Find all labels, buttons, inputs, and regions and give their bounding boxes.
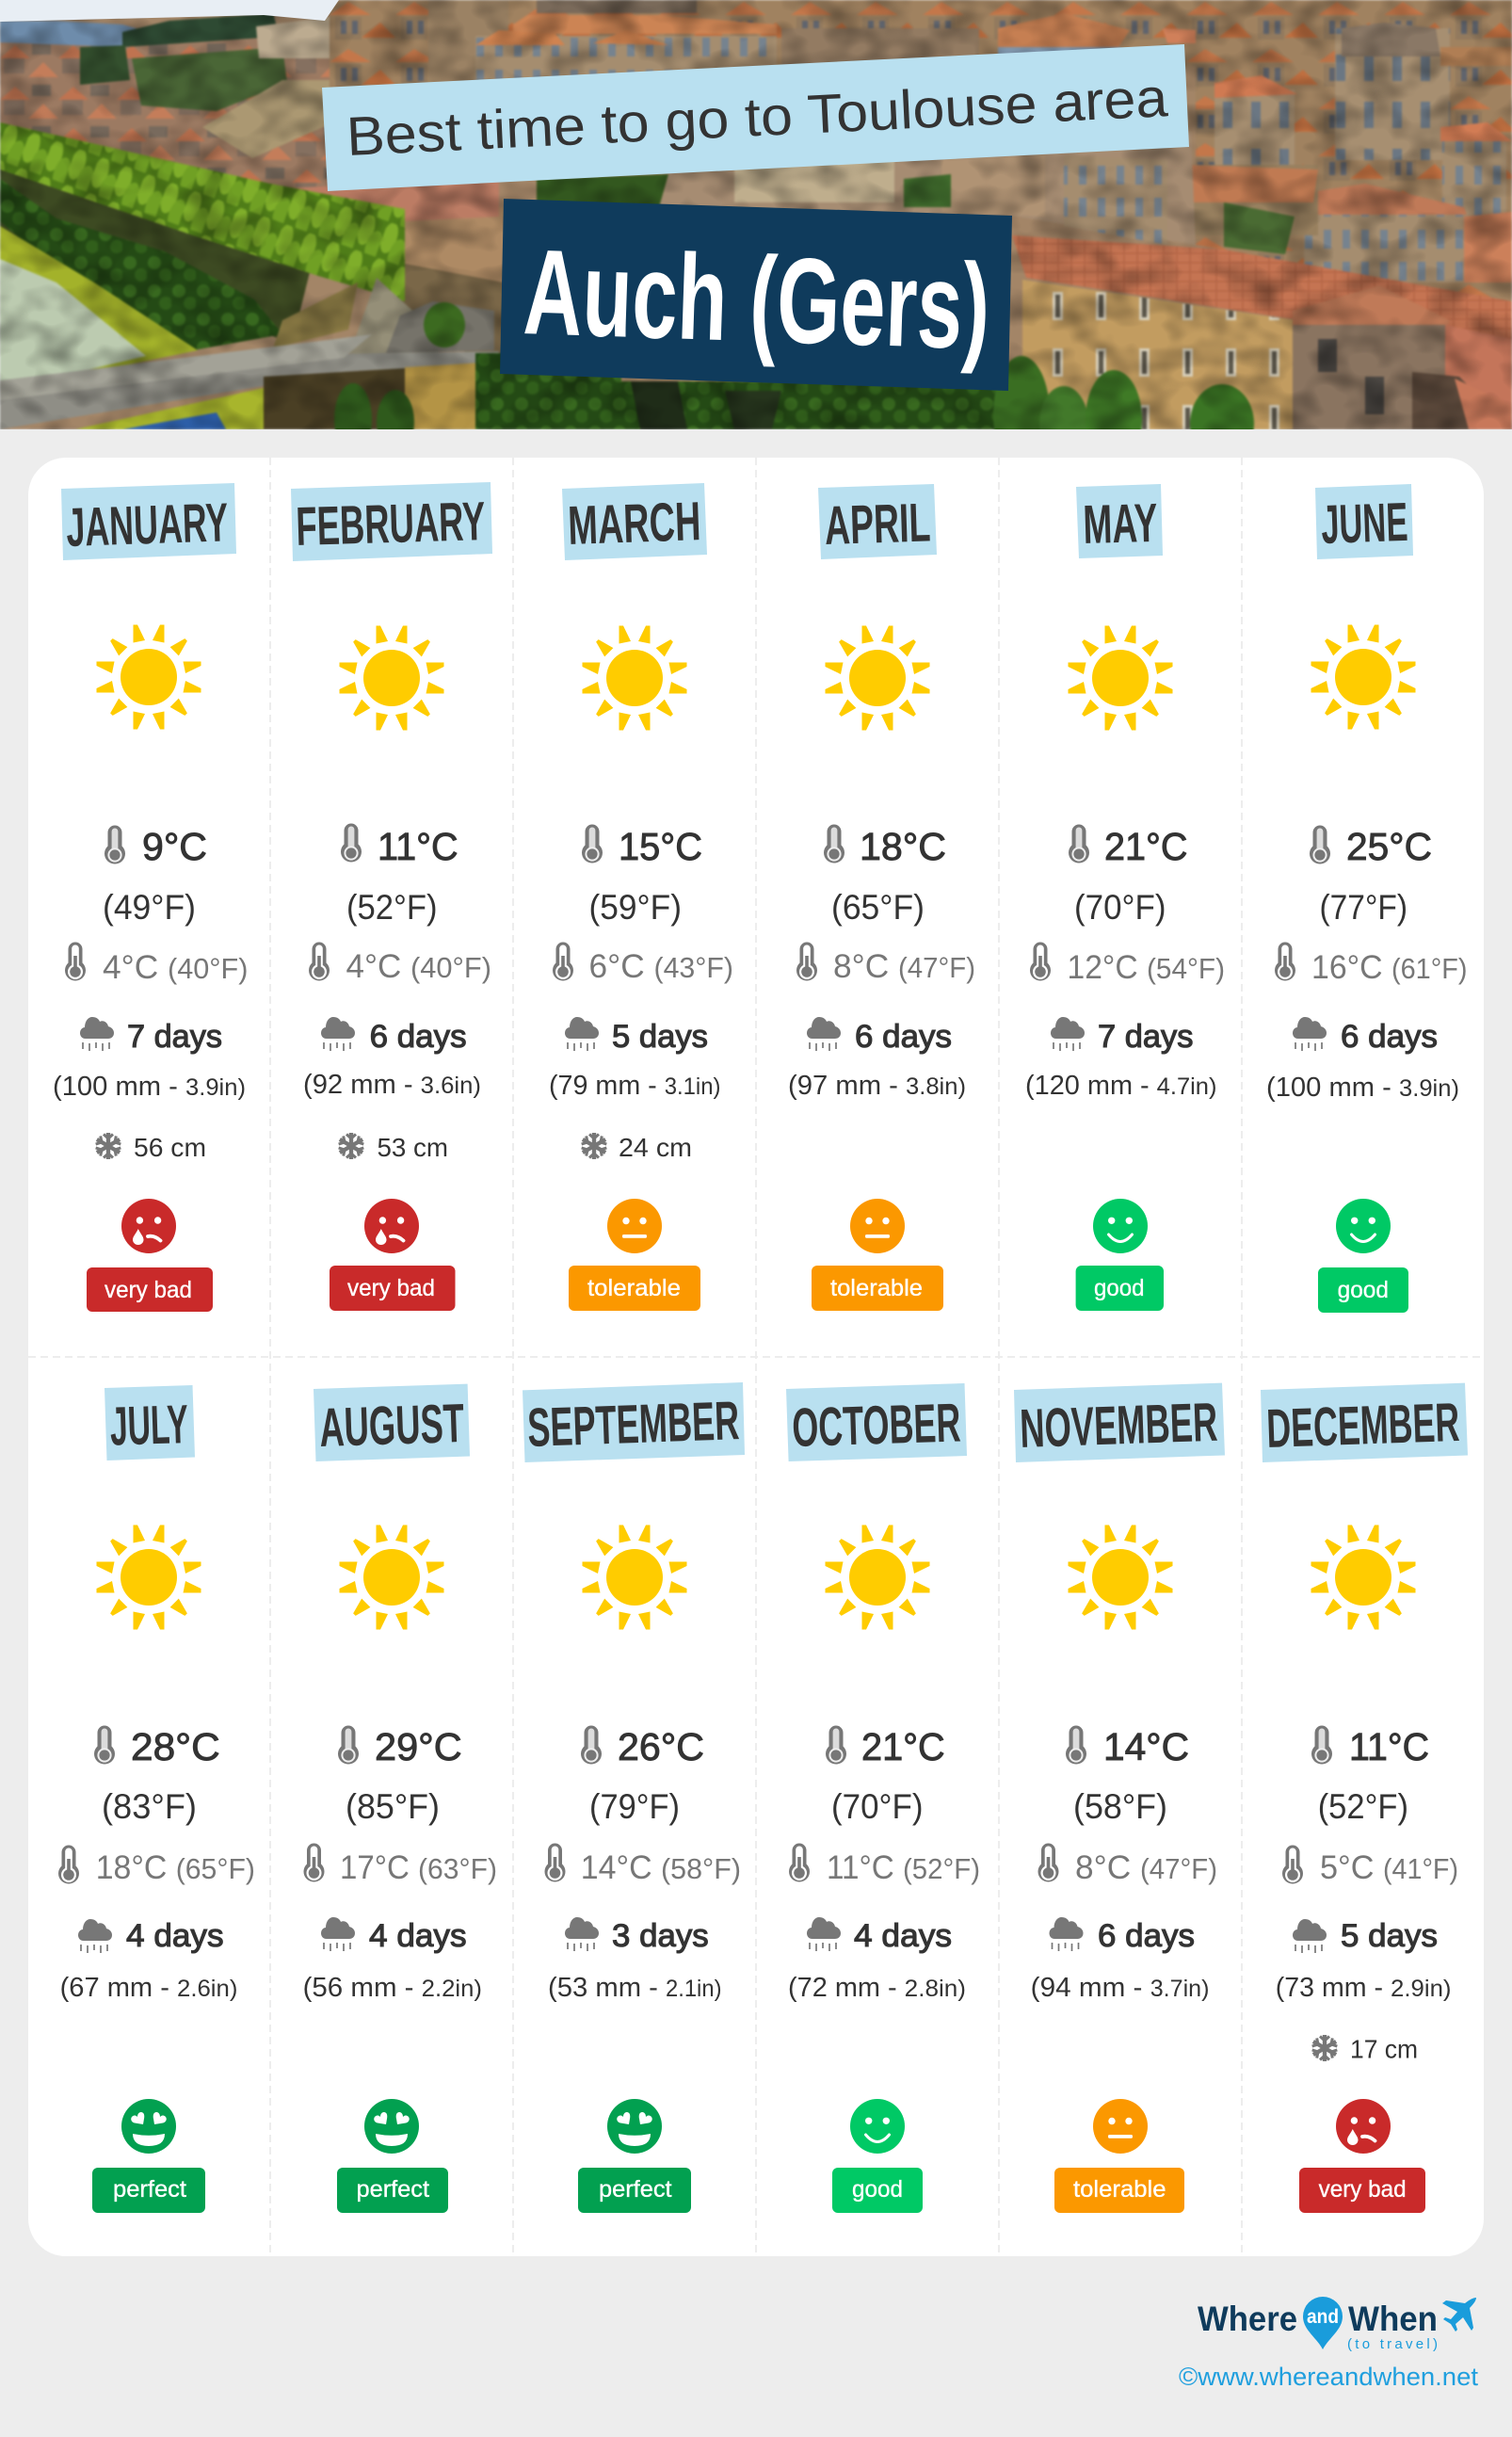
mean temperature <box>103 825 207 927</box>
panel: October <box>786 1383 980 2213</box>
minimum temperature <box>309 942 491 985</box>
mean temperature: (79°F) <box>589 1787 680 1826</box>
rating: perfect <box>92 2099 205 2213</box>
minimum temperature: 11°C <box>827 1849 903 1886</box>
rainfall: (53 mm - <box>548 1973 666 2003</box>
heading: MAY: MAY <box>1083 492 1158 556</box>
heading: FEBRUARY <box>291 482 492 561</box>
minimum temperature: (58°F) <box>661 1852 741 1885</box>
rating: good <box>1076 1199 1164 1311</box>
icon: sun <box>96 1525 201 1629</box>
panel: March <box>549 483 733 1311</box>
rainfall <box>303 1017 481 1100</box>
heading: AUGUST <box>314 1384 470 1461</box>
mean temperature <box>341 823 458 927</box>
heading: JANUARY: JANUARY <box>65 492 229 558</box>
rating: tolerable: tolerable <box>830 1275 923 1301</box>
rainfall: 2.2in) <box>422 1976 482 2002</box>
mean temperature <box>338 1725 462 1826</box>
panel: February <box>291 482 492 1311</box>
rating: good <box>1318 1199 1408 1313</box>
logo: Where and When to travel: (to travel) <box>1347 2336 1438 2352</box>
mean temperature <box>581 1725 704 1826</box>
mean temperature: 11°C <box>1349 1725 1429 1768</box>
heading: FEBRUARY: FEBRUARY <box>295 491 486 557</box>
minimum temperature <box>1282 1846 1458 1886</box>
rainfall: 6 days <box>855 1019 952 1055</box>
rainfall <box>1266 1017 1459 1103</box>
minimum temperature <box>796 942 975 985</box>
rainfall: (67 mm - <box>60 1973 177 2003</box>
rainfall: 3.9in) <box>1399 1075 1459 1102</box>
copyright line: ©www.whereandwhen.net <box>1179 2363 1478 2391</box>
mean temperature: (58°F) <box>1073 1787 1167 1826</box>
minimum temperature <box>1030 942 1225 986</box>
rainfall: 2.1in) <box>666 1976 721 2002</box>
heading: SEPTEMBER: SEPTEMBER <box>526 1390 740 1459</box>
minimum temperature: 17°C <box>340 1849 418 1886</box>
icon: sun <box>1311 1525 1416 1629</box>
panel: November <box>1014 1383 1225 2213</box>
heading: JANUARY <box>61 483 236 560</box>
minimum temperature: (40°F) <box>410 951 491 984</box>
minimum temperature: (61°F) <box>1391 952 1467 985</box>
mean temperature: (83°F) <box>102 1787 197 1826</box>
rainfall: (72 mm - <box>788 1973 905 2003</box>
minimum temperature: 6°C <box>589 948 653 985</box>
panel: calendar card <box>28 458 1484 2256</box>
mean temperature: 14°C <box>1103 1725 1189 1768</box>
mean temperature: (52°F) <box>346 888 438 927</box>
heading: APRIL: APRIL <box>824 492 931 557</box>
rainfall: (79 mm - <box>549 1071 665 1101</box>
mean temperature <box>1311 1725 1429 1826</box>
minimum temperature: 5°C <box>1320 1849 1383 1886</box>
snowfall: 24 cm <box>619 1133 692 1162</box>
rainfall: (92 mm - <box>303 1070 421 1100</box>
mean temperature: 25°C <box>1346 825 1432 868</box>
rainfall: (56 mm - <box>303 1973 422 2003</box>
mean temperature: 11°C <box>378 825 458 868</box>
minimum temperature: (65°F) <box>176 1852 255 1885</box>
heading: OCTOBER <box>786 1383 967 1461</box>
rating: tolerable <box>812 1199 943 1311</box>
rainfall: 4 days <box>369 1918 467 1954</box>
rainfall: (100 mm - <box>1266 1073 1399 1103</box>
heading: NOVEMBER <box>1014 1383 1225 1462</box>
logo: Where and When to travel: When <box>1348 2300 1438 2338</box>
header photo: aerial view of Auch <box>0 0 1512 473</box>
rating: very bad <box>1299 2099 1425 2213</box>
location banner: Auch (Gers): Auch (Gers) <box>522 224 992 375</box>
mean temperature <box>1066 1725 1189 1826</box>
mean temperature <box>826 1725 945 1826</box>
rating: good <box>832 2099 923 2213</box>
rainfall: 2.6in) <box>177 1976 237 2002</box>
minimum temperature: 4°C <box>346 948 410 985</box>
minimum temperature: (47°F) <box>898 951 975 984</box>
icon: map pin: and <box>1307 2306 1339 2328</box>
rating: good: good <box>1094 1275 1145 1301</box>
panel: August <box>303 1384 497 2213</box>
panel: September <box>523 1382 745 2213</box>
rainfall: 4 days <box>126 1918 224 1954</box>
panel: December <box>1261 1383 1468 2213</box>
heading: NOVEMBER: NOVEMBER <box>1019 1392 1218 1460</box>
icon: sun <box>96 625 201 729</box>
rating: tolerable <box>569 1199 700 1311</box>
logo: Where and When to travel <box>1198 2297 1476 2352</box>
rainfall <box>788 1017 966 1101</box>
rainfall <box>788 1917 966 2003</box>
rainfall <box>1276 1918 1452 2003</box>
mean temperature <box>1310 825 1432 927</box>
minimum temperature <box>65 942 249 986</box>
minimum temperature: 4°C <box>103 949 168 986</box>
rating: very bad: very bad <box>105 1277 192 1303</box>
minimum temperature: (40°F) <box>168 952 249 985</box>
mean temperature <box>824 825 946 927</box>
rating: tolerable: tolerable <box>587 1275 681 1301</box>
snowfall: 53 cm <box>377 1133 448 1162</box>
rainfall: 7 days <box>127 1019 222 1055</box>
heading: MAY <box>1076 484 1163 558</box>
icon: plane <box>1442 2298 1476 2332</box>
panel: April <box>788 484 975 1311</box>
rainfall: 5 days <box>612 1019 708 1055</box>
mean temperature: 21°C <box>1104 825 1188 868</box>
rating: good: good <box>1338 1277 1389 1303</box>
icon: sun <box>1068 625 1173 731</box>
snowfall <box>1311 2034 1418 2064</box>
title banner: Best time to go to Toulouse area: Best time to go to Toulouse area <box>346 67 1169 168</box>
mean temperature: (85°F) <box>346 1787 440 1826</box>
rainfall <box>548 1917 721 2003</box>
heading: JULY: JULY <box>109 1394 189 1458</box>
minimum temperature: 18°C <box>96 1849 176 1886</box>
minimum temperature: (43°F) <box>653 951 733 984</box>
rainfall: 3.7in) <box>1150 1976 1209 2002</box>
panel: January <box>53 483 249 1312</box>
rating: perfect: perfect <box>599 2176 672 2203</box>
snowfall <box>94 1133 206 1162</box>
minimum temperature: (41°F) <box>1383 1852 1458 1885</box>
heading: MARCH <box>562 483 707 560</box>
mean temperature <box>582 825 702 927</box>
panel: May <box>1025 484 1225 1311</box>
rainfall: 4 days <box>854 1918 952 1954</box>
rating: very bad <box>87 1199 213 1312</box>
rating: good: good <box>852 2176 903 2203</box>
heading: AUGUST: AUGUST <box>318 1393 465 1459</box>
rating: tolerable <box>1054 2099 1184 2213</box>
mean temperature: 28°C <box>131 1725 220 1768</box>
minimum temperature: 16°C <box>1311 949 1391 986</box>
mean temperature: (77°F) <box>1320 888 1407 927</box>
minimum temperature <box>789 1844 980 1886</box>
mean temperature: (52°F) <box>1318 1787 1408 1826</box>
snowfall <box>580 1133 692 1162</box>
rainfall: (97 mm - <box>788 1071 906 1101</box>
rating: very bad: very bad <box>347 1275 435 1301</box>
mean temperature: 18°C <box>860 825 946 868</box>
rainfall: 2.9in) <box>1391 1976 1452 2002</box>
icon: sun <box>1068 1525 1173 1629</box>
minimum temperature <box>544 1844 741 1886</box>
minimum temperature <box>553 942 733 985</box>
minimum temperature <box>58 1846 255 1886</box>
rainfall: 7 days <box>1098 1019 1194 1055</box>
mean temperature <box>94 1725 220 1826</box>
icon: sun <box>1311 625 1416 729</box>
rainfall: (94 mm - <box>1031 1973 1150 2003</box>
rating: perfect: perfect <box>113 2176 186 2203</box>
mean temperature: 21°C <box>861 1725 945 1768</box>
logo: Where and When to travel: Where <box>1198 2300 1297 2338</box>
rainfall: 4.7in) <box>1157 1073 1216 1100</box>
rainfall: 3 days <box>612 1918 709 1954</box>
heading: JUNE <box>1315 484 1413 559</box>
rainfall: 3.6in) <box>421 1073 481 1099</box>
mean temperature: (70°F) <box>1074 888 1166 927</box>
rating: perfect <box>578 2099 691 2213</box>
rating: very bad <box>330 1199 456 1311</box>
minimum temperature: (63°F) <box>418 1852 497 1885</box>
minimum temperature: 8°C <box>1075 1849 1140 1886</box>
minimum temperature: 8°C <box>833 948 898 985</box>
rating: tolerable: tolerable <box>1073 2176 1166 2203</box>
rainfall <box>303 1917 482 2003</box>
icon: map pin <box>1303 2297 1343 2349</box>
rainfall: 2.8in) <box>905 1976 966 2002</box>
mean temperature: 29°C <box>375 1725 462 1768</box>
rating: perfect <box>337 2099 448 2213</box>
heading: APRIL <box>818 484 937 559</box>
rainfall: (120 mm - <box>1025 1071 1157 1101</box>
rainfall <box>1025 1017 1216 1101</box>
mean temperature: 9°C <box>142 825 207 868</box>
mean temperature <box>1069 825 1188 927</box>
panel: July <box>58 1385 255 2213</box>
rainfall <box>1031 1917 1209 2003</box>
mean temperature: (65°F) <box>831 888 925 927</box>
minimum temperature <box>1037 1844 1217 1886</box>
mean temperature: (49°F) <box>103 888 196 927</box>
rainfall: 3.9in) <box>185 1074 246 1101</box>
snowfall: 17 cm <box>1350 2034 1418 2064</box>
rainfall: 6 days <box>1341 1019 1438 1055</box>
rainfall: (73 mm - <box>1276 1973 1391 2003</box>
minimum temperature: 14°C <box>581 1849 661 1886</box>
icon: sun <box>582 1525 687 1629</box>
minimum temperature: 12°C <box>1068 949 1147 986</box>
rainfall <box>549 1017 721 1101</box>
rainfall: 3.1in) <box>665 1073 721 1100</box>
rating: very bad: very bad <box>1319 2176 1407 2203</box>
heading: SEPTEMBER <box>523 1382 745 1462</box>
heading: JUNE: JUNE <box>1320 492 1408 556</box>
mean temperature: (59°F) <box>589 888 682 927</box>
rainfall: 6 days <box>1098 1918 1195 1954</box>
rainfall <box>53 1017 246 1102</box>
minimum temperature: (52°F) <box>903 1852 980 1885</box>
mean temperature: (70°F) <box>831 1787 923 1826</box>
heading: JULY <box>105 1385 195 1461</box>
snowfall <box>337 1133 448 1162</box>
location banner: Auch (Gers) <box>500 199 1012 391</box>
mean temperature: 15°C <box>619 825 702 868</box>
rainfall: 5 days <box>1341 1918 1438 1954</box>
rainfall <box>60 1918 237 2003</box>
minimum temperature <box>303 1844 497 1886</box>
mean temperature: 26°C <box>618 1725 704 1768</box>
heading: MARCH: MARCH <box>567 491 701 557</box>
rainfall: 3.8in) <box>906 1073 966 1100</box>
minimum temperature: (47°F) <box>1140 1852 1217 1885</box>
icon: sun <box>339 625 444 731</box>
heading: OCTOBER: OCTOBER <box>791 1392 961 1459</box>
minimum temperature: (54°F) <box>1147 952 1225 985</box>
rainfall: (100 mm - <box>53 1072 185 1102</box>
rating: perfect: perfect <box>356 2176 429 2203</box>
icon: sun <box>339 1525 444 1629</box>
snowfall: 56 cm <box>134 1133 206 1162</box>
panel: June <box>1266 484 1467 1313</box>
minimum temperature <box>1275 942 1467 986</box>
title banner: Best time to go to Toulouse area <box>322 44 1189 191</box>
rainfall: 6 days <box>370 1019 467 1055</box>
icon: sun <box>582 625 687 731</box>
icon: sun <box>825 625 930 731</box>
icon: sun <box>825 1525 930 1629</box>
